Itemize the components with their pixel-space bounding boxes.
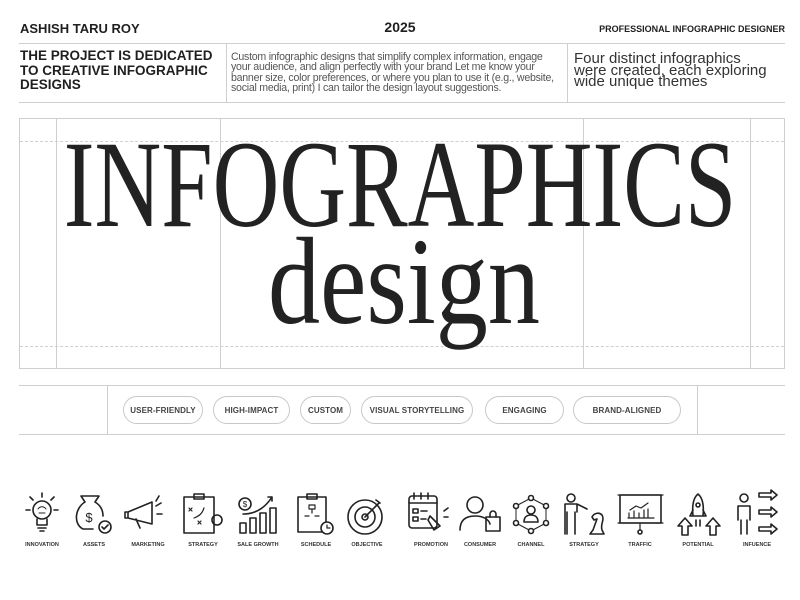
text block: four infographics: wide unique themes [574, 73, 707, 90]
icon: channel [514, 496, 548, 548]
pill: brand-aligned [573, 396, 681, 424]
icon: sale growth: $ [243, 500, 248, 509]
text block: project statement: TO CREATIVE INFOGRAPHIC [20, 62, 208, 78]
text block: description [231, 51, 554, 94]
icon: marketing [125, 496, 165, 548]
title: INFOGRAPHICS: INFOGRAPHICS [64, 116, 736, 253]
icon: consumer [460, 497, 500, 548]
icon: innovation [25, 493, 59, 548]
text block: description: Custom infographic designs that simplify complex information, engage [231, 51, 543, 63]
icon: strategy chess: STRATEGY [569, 542, 599, 548]
icon: traffic: TRAFFIC [628, 542, 652, 548]
icon: traffic [618, 495, 663, 548]
icon: influence [738, 490, 777, 548]
pill: custom: CUSTOM [308, 406, 343, 414]
text block: four infographics: Four distinct infographics [574, 50, 741, 67]
icon: channel: CHANNEL [518, 542, 545, 548]
header: role: PROFESSIONAL INFOGRAPHIC DESIGNER [599, 24, 785, 34]
icon: assets: $ [85, 510, 93, 525]
icon: influence: INFUENCE [743, 542, 771, 548]
icon: strategy: STRATEGY [188, 542, 218, 548]
pill: visual storytelling: VISUAL STORYTELLING [370, 406, 464, 414]
pill: visual storytelling [361, 396, 473, 424]
text block: description: banner size, color preferences, or where you plan to use it (e.g., website, [231, 72, 554, 84]
text block: description: your audience, and align perfectly with your brand Let me know your [231, 61, 535, 73]
icon: schedule: SCHEDULE [301, 542, 331, 548]
icon: potential [678, 494, 720, 548]
icon: assets [76, 496, 111, 548]
icon: objective [348, 500, 383, 548]
text block: description: social media, print) I can tailor the design layout suggestions. [231, 82, 501, 94]
icon row [25, 489, 778, 548]
text block: project statement [20, 48, 213, 92]
icon: marketing: MARKETING [131, 542, 165, 548]
icon: sale growth [237, 497, 279, 548]
text block: project statement: THE PROJECT IS DEDICATED [20, 48, 213, 63]
text block: project statement: DESIGNS [20, 77, 81, 92]
pill: engaging: ENGAGING [502, 406, 547, 414]
icon: strategy [184, 494, 222, 548]
pill: high-impact: HIGH-IMPACT [225, 406, 278, 414]
text block: four infographics: were created, each exploring [574, 62, 767, 78]
text block: four infographics [574, 50, 767, 90]
pill: engaging [485, 396, 564, 424]
title: design: design [268, 213, 540, 350]
icon: innovation: INNOVATION [25, 542, 59, 548]
icon: objective: OBJECTIVE [351, 542, 383, 548]
icon: sale growth: SALE GROWTH [237, 542, 279, 548]
panel: title box [19, 118, 785, 369]
pill: custom [300, 396, 351, 424]
icon: potential: POTENTIAL [682, 542, 714, 548]
header: name: ASHISH TARU ROY [20, 21, 140, 36]
icon: schedule [298, 494, 333, 548]
icon: strategy chess [565, 494, 604, 548]
pill: brand-aligned: BRAND-ALIGNED [593, 406, 661, 414]
pill: high-impact [213, 396, 290, 424]
tags row [123, 396, 681, 424]
header: year: 2025 [384, 19, 416, 35]
icon: assets: ASSETS [83, 542, 105, 548]
pill: user-friendly [123, 396, 203, 424]
icon: consumer: CONSUMER [464, 542, 496, 548]
icon: promotion: PROMOTION [414, 542, 448, 548]
pill: user-friendly: USER-FRIENDLY [130, 406, 196, 414]
icon: promotion [409, 493, 448, 548]
